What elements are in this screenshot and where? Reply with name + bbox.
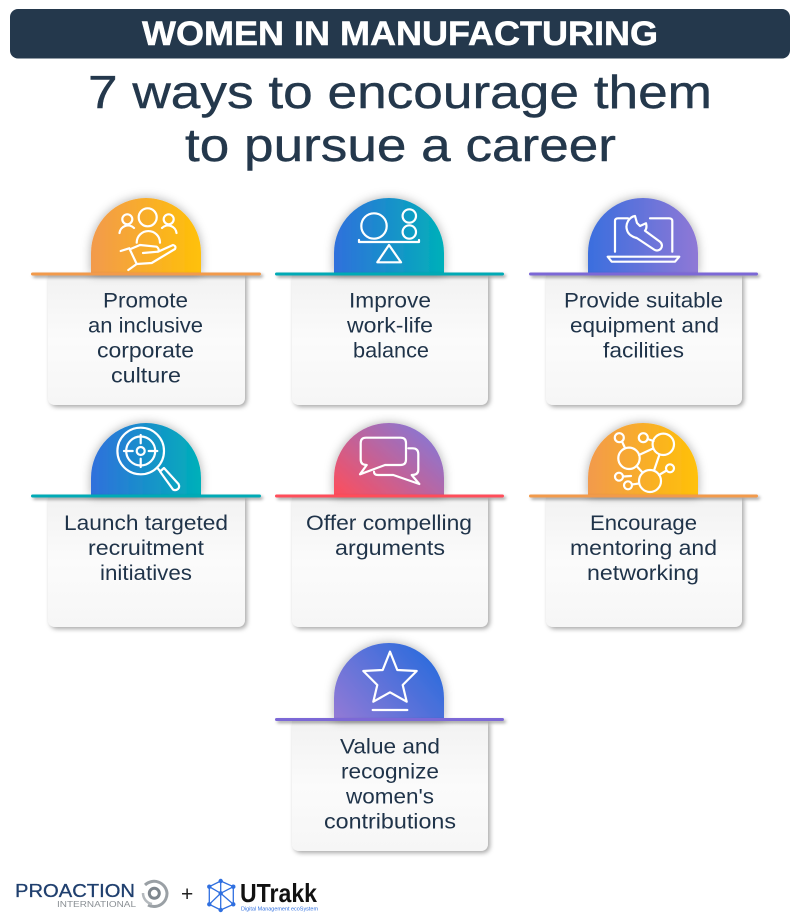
card text: Improve — [349, 288, 431, 312]
card text: recognize — [341, 760, 439, 784]
logo: Proaction International: PROACTION — [15, 881, 135, 901]
card text: Provide suitable — [564, 288, 723, 312]
heading: to pursue a career — [185, 119, 616, 171]
logo: Proaction International — [15, 881, 167, 909]
heading: 7 ways to encourage them — [88, 66, 712, 118]
icon: people in hand — [120, 208, 176, 270]
card text — [306, 511, 472, 560]
card text: Offer compelling — [306, 511, 472, 535]
card text: networking — [587, 561, 699, 585]
title banner — [10, 9, 790, 58]
panel: mentoring and networking — [529, 423, 758, 627]
panel: equipment and facilities — [529, 198, 758, 405]
card text: Value and — [340, 734, 440, 758]
panel: targeted recruitment — [31, 423, 261, 627]
card text: women's — [345, 784, 434, 808]
card text: arguments — [335, 536, 445, 560]
panel: value contributions — [275, 643, 504, 851]
card text: culture — [111, 364, 181, 388]
card text: contributions — [324, 810, 456, 834]
card text: equipment and — [570, 314, 719, 338]
card text: an inclusive — [88, 314, 203, 338]
card text: mentoring and — [570, 536, 717, 560]
logo: UTrakk: Digital Management ecoSystem — [241, 906, 318, 912]
logo: Proaction International: INTERNATIONAL — [57, 900, 137, 909]
icon: network nodes — [615, 433, 674, 492]
card text: balance — [353, 338, 429, 362]
card text: recruitment — [88, 536, 204, 560]
logo: UTrakk — [207, 878, 318, 912]
icon: magnifier with target — [117, 428, 179, 490]
card text: initiatives — [100, 561, 192, 585]
card text: facilities — [603, 338, 684, 362]
card text: Launch targeted — [64, 511, 228, 535]
plus sign: + — [181, 883, 193, 906]
card text — [570, 511, 717, 585]
card text — [564, 288, 723, 362]
card text: work-life — [346, 314, 433, 338]
panel: work-life balance — [275, 198, 504, 405]
title banner: WOMEN IN MANUFACTURING — [142, 15, 658, 53]
panel: inclusive culture — [31, 198, 261, 405]
card text — [324, 734, 456, 834]
card text — [64, 511, 228, 585]
card text: corporate — [97, 338, 194, 362]
card text — [88, 288, 203, 388]
icon: star — [363, 652, 417, 710]
heading — [88, 66, 712, 171]
icon: balance scale — [359, 209, 419, 262]
card text — [346, 288, 433, 362]
panel: compelling arguments — [275, 423, 504, 627]
card text: Encourage — [590, 511, 697, 535]
icon: laptop with wrench — [608, 216, 679, 262]
logo: UTrakk: UTrakk — [240, 878, 317, 908]
icon: speech bubbles — [360, 438, 419, 484]
card text: Promote — [103, 288, 188, 312]
